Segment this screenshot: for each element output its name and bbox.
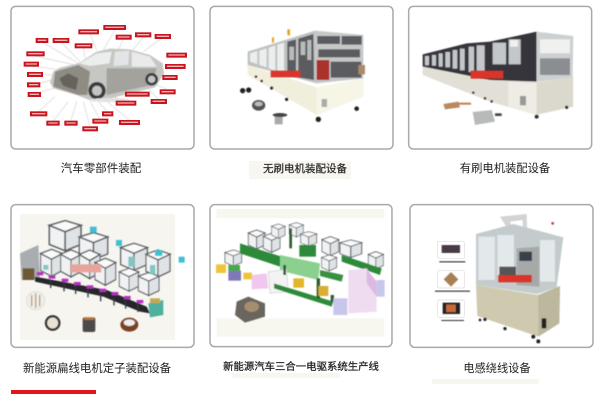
panel: brushless motor assembly: [210, 6, 393, 179]
logo watermark: [498, 275, 532, 282]
panel: flat-wire motor stator assembly: [11, 205, 194, 375]
product thumbnail: inductor 3: [438, 300, 464, 321]
panel: auto parts assembly: [11, 6, 194, 175]
caption: 无刷电机装配设备: [263, 162, 347, 175]
logo watermark: [271, 71, 301, 77]
caption: 汽车零部件装配: [61, 161, 142, 175]
panel: three-in-one e-drive production line: [210, 205, 392, 378]
pale strip under caption: [432, 379, 539, 384]
caption: 新能源扁线电机定子装配设备: [23, 361, 172, 375]
caption: 新能源汽车三合一电驱系统生产线: [223, 360, 379, 373]
illustration: inductor winding machine: [476, 214, 563, 343]
logo watermark: [71, 264, 101, 272]
red accent bar: [11, 390, 96, 394]
callout labels: [24, 25, 187, 131]
panel: brushed motor assembly: [409, 6, 592, 175]
caption: 电感绕线设备: [463, 361, 531, 375]
illustration: brushless assembly line: [240, 29, 365, 124]
product thumbnail: inductor 2: [435, 271, 470, 292]
illustration: e-drive line layout: [216, 223, 385, 323]
panel: inductor winding equipment: [410, 205, 593, 384]
illustration: stator assembly layout: [20, 214, 175, 340]
callout label text marks: [26, 27, 185, 129]
product thumbnail: inductor 1: [438, 241, 465, 263]
logo watermark: [471, 71, 503, 79]
illustration: car cutaway with callouts: [32, 30, 170, 127]
pale strip under caption: [232, 373, 340, 378]
caption: 有刷电机装配设备: [460, 161, 550, 175]
illustration: brushed assembly line: [423, 32, 573, 125]
caption strip: [249, 161, 351, 179]
